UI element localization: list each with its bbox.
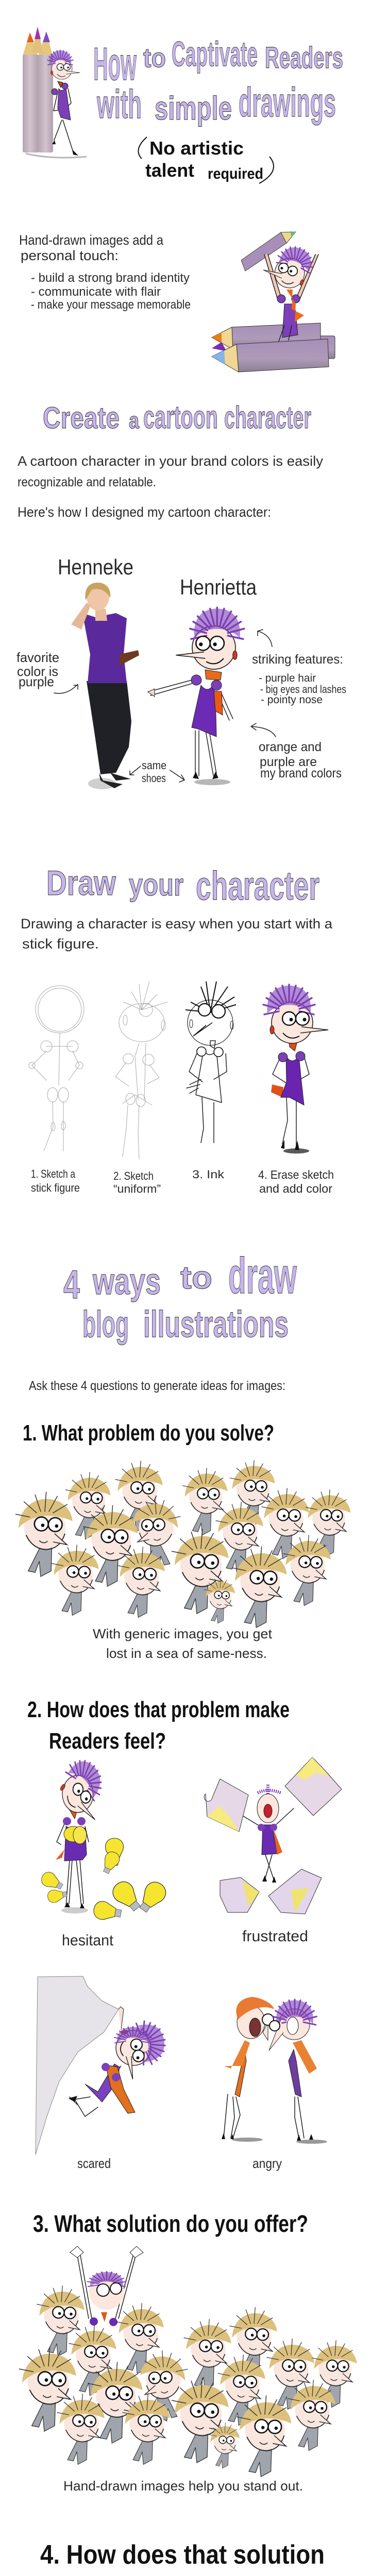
- orange figure: [222, 1997, 274, 2139]
- title heading: Captivate: [172, 35, 258, 74]
- crowd of faces: [20, 2286, 357, 2477]
- intro text: - build a strong brand identity: [31, 271, 190, 285]
- step captions: 2. Sketch: [113, 1170, 154, 1182]
- section heading: draw your character: your: [129, 868, 183, 902]
- draw intro text: [21, 916, 333, 952]
- label: hesitant: hesitant: [62, 1932, 114, 1949]
- annotation: brand colors: my brand colors: [260, 766, 342, 781]
- section heading: 4 ways to draw blog illustrations: blog: [82, 1304, 129, 1345]
- step 4 colored figure: [263, 985, 328, 1154]
- section heading: draw your character: [46, 863, 319, 908]
- step captions: [31, 1167, 334, 1195]
- crowd caption: With generic images, you get: [93, 1626, 273, 1641]
- section heading: 4 ways to draw blog illustrations: 4: [63, 1262, 80, 1307]
- question 2 heading: [27, 1697, 290, 1754]
- section heading: 4 ways to draw blog illustrations: ways: [92, 1261, 161, 1302]
- illustration: angry figures: [222, 1997, 327, 2144]
- pencil stack: [212, 323, 335, 372]
- title heading: How: [93, 39, 137, 90]
- subtitle: talent: [145, 160, 194, 181]
- step captions: 4. Erase sketch: [258, 1168, 334, 1181]
- question 2 heading: 2. How does that problem make: [27, 1697, 290, 1722]
- title heading: to: [143, 43, 166, 73]
- question 3 heading: 3. What solution do you offer?: [33, 2210, 308, 2237]
- label: angry: angry: [252, 2156, 282, 2171]
- crowd of generic faces: [16, 1461, 351, 1628]
- name: Henneke: Henneke: [58, 555, 133, 579]
- section heading: create a cartoon character: [43, 400, 311, 435]
- annotation: same shoes: same: [142, 759, 166, 772]
- draw intro text: stick figure.: [22, 936, 99, 952]
- step 3 ink: [185, 981, 236, 1143]
- question 1 heading: 1. What problem do you solve?: [23, 1420, 274, 1446]
- illustration: frustrated with puzzle pieces: [204, 1757, 342, 1914]
- section heading: create a cartoon character: Create: [43, 401, 120, 435]
- intro text: personal touch:: [21, 248, 119, 263]
- section heading: draw your character: Draw: [46, 863, 116, 903]
- section heading: 4 ways to draw blog illustrations: illustrations: [143, 1304, 289, 1345]
- annotation: striking features: [252, 630, 346, 706]
- annotation: striking features: - purple hair: [259, 672, 316, 684]
- step captions: “uniform”: [113, 1182, 161, 1195]
- annotation: favorite color: [16, 650, 78, 693]
- character intro text: recognizable and relatable.: [18, 475, 156, 489]
- title block: [23, 27, 343, 183]
- title heading: simple: [155, 90, 232, 127]
- questions intro: Ask these 4 questions to generate ideas for images:: [29, 1379, 285, 1393]
- purple figure: [269, 1999, 317, 2141]
- illustration: hesitant with light bulbs: [39, 1751, 170, 1923]
- annotation: striking features: - pointy nose: [261, 694, 323, 706]
- Henrietta cheering: [260, 239, 318, 341]
- annotation: favorite color: color is: [17, 664, 58, 679]
- section heading: 4 ways to draw blog illustrations: [63, 1247, 297, 1345]
- crowd caption: lost in a sea of same-ness.: [106, 1646, 267, 1661]
- puzzle pieces on floor: [220, 1869, 322, 1914]
- subtitle: [138, 137, 274, 183]
- illustration: scared on cliff: [36, 1976, 171, 2155]
- annotation: brand colors: purple are: [260, 755, 317, 769]
- crowd caption: [93, 1626, 273, 1661]
- crowd caption 2: Hand-drawn images help you stand out.: [63, 2478, 303, 2494]
- annotation: favorite color: favorite: [16, 650, 59, 665]
- question 2 heading: Readers feel?: [49, 1728, 166, 1754]
- title heading: with: [96, 81, 142, 127]
- Henrietta cheering above crowd: [70, 2246, 143, 2326]
- section heading: create a cartoon character: a: [129, 408, 139, 433]
- character intro text: A cartoon character in your brand colors is easily: [18, 453, 324, 469]
- character intro text: Here's how I designed my cartoon character:: [18, 504, 271, 520]
- annotation: striking features: - big eyes and lashes: [260, 684, 346, 696]
- annotation: brand colors: [251, 723, 342, 781]
- illustration: Henrietta lifting a pencil on pencil stack: [212, 231, 335, 372]
- annotation: same shoes: shoes: [142, 772, 166, 785]
- illustration: Henrietta standing out from the crowd: [20, 2246, 357, 2477]
- annotation: striking features: striking features:: [252, 652, 343, 667]
- annotation: brand colors: orange and: [259, 740, 322, 754]
- section heading: 4 ways to draw blog illustrations: draw: [228, 1247, 297, 1304]
- question 4 heading: 4. How does that solution: [40, 2540, 325, 2570]
- title heading: [93, 35, 343, 127]
- cliff: [36, 1976, 119, 2155]
- raised pencil: [241, 231, 296, 271]
- intro text: - communicate with flair: [31, 285, 161, 299]
- section heading: create a cartoon character: character: [224, 400, 311, 435]
- annotation: favorite color: purple: [19, 674, 54, 689]
- cartoon figure: Henrietta: [148, 607, 244, 785]
- light bulbs: [39, 1838, 170, 1923]
- subtitle: required: [208, 165, 263, 182]
- intro text: - make your message memorable: [31, 298, 191, 312]
- label: scared: scared: [77, 2156, 111, 2171]
- illustration: giant pencils with Henrietta peeking: [23, 27, 87, 158]
- step captions: and add color: [259, 1182, 332, 1195]
- photo figure: Henneke: [71, 583, 139, 789]
- name: Henrietta: Henrietta: [180, 575, 257, 599]
- step 2 sketch: uniform: [115, 981, 167, 1159]
- step captions: 1. Sketch a: [31, 1167, 76, 1180]
- intro text: [19, 232, 191, 312]
- section heading: 4 ways to draw blog illustrations: to: [180, 1260, 212, 1296]
- intro text: Hand-drawn images add a: [19, 232, 164, 248]
- character intro text: [18, 453, 324, 520]
- step 1 sketch: stick figure: [29, 986, 84, 1151]
- draw intro text: Drawing a character is easy when you start with a: [21, 916, 333, 931]
- subtitle: No artistic: [149, 138, 244, 159]
- step captions: 3. Ink: [192, 1168, 225, 1181]
- label: frustrated: frustrated: [242, 1928, 308, 1945]
- annotation: same shoes: [130, 759, 184, 785]
- section heading: create a cartoon character: cartoon: [143, 400, 218, 435]
- step captions: stick figure: [31, 1181, 80, 1194]
